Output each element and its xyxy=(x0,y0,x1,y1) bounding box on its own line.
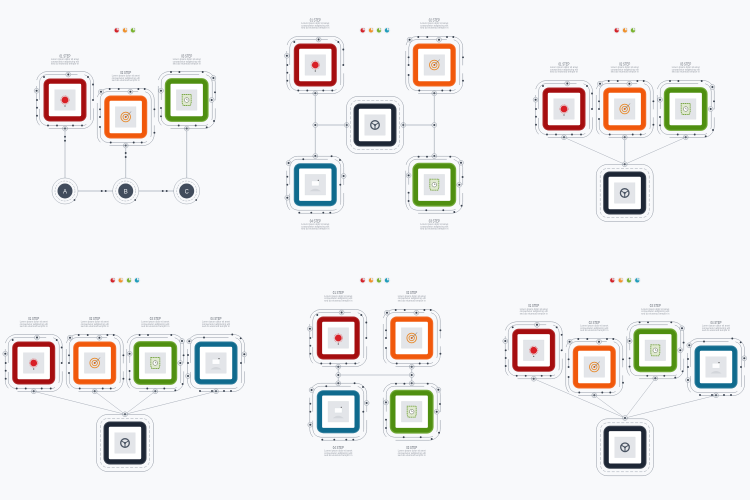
label: step 01: Lorem ipsum dolor sit amet xyxy=(324,295,353,298)
card: orange step xyxy=(566,338,624,396)
label: step 04: 04 STEP xyxy=(333,445,344,450)
panel: four steps in a row into one xyxy=(3,277,247,472)
node C xyxy=(174,178,200,204)
label: step 03: sed do eiusmod tempor in xyxy=(141,325,170,328)
card: dark result xyxy=(596,164,653,222)
card: red step xyxy=(307,310,367,366)
label: step 02: 02 STEP xyxy=(619,62,630,66)
legend dots xyxy=(359,27,390,34)
label: step 02: 02 STEP xyxy=(89,316,100,321)
label: step 04: Lorem ipsum dolor sit amet xyxy=(301,223,330,226)
label: step 03: Lorem ipsum dolor sit amet xyxy=(173,58,201,61)
label: step 02 xyxy=(398,290,426,302)
label: step 04: Lorem ipsum dolor sit amet xyxy=(702,324,730,327)
label: step 03: sed do eiusmod tempor in xyxy=(672,71,700,74)
label: step 01: consectetur adipiscing elit xyxy=(20,323,48,326)
label: step 03: consectetur adipiscing elit xyxy=(641,310,670,313)
connector lines xyxy=(62,126,189,192)
label: step 01: Lorem ipsum dolor sit amet xyxy=(20,320,48,323)
label: step 03: consectetur adipiscing elit xyxy=(420,225,449,228)
label: step 03: consectetur adipiscing elit xyxy=(398,452,426,455)
label: step 03 xyxy=(173,53,201,66)
label: step 02: 02 STEP xyxy=(406,290,417,295)
label: step 03: 03 STEP xyxy=(429,218,440,223)
card: blue step xyxy=(308,382,369,441)
label: step 02: sed do eiusmod tempor in xyxy=(580,329,609,332)
card: dark result xyxy=(96,414,154,472)
label: step 01: sed do eiusmod tempor in xyxy=(324,299,353,302)
node A: A xyxy=(63,188,67,196)
card: green step xyxy=(406,156,464,213)
card: green step xyxy=(657,80,715,138)
label: step 03: consectetur adipiscing elit xyxy=(672,68,700,72)
label: step 04 xyxy=(301,218,330,230)
label: step 04: consectetur adipiscing elit xyxy=(324,452,353,455)
connector lines xyxy=(562,135,688,167)
label: step 02: 02 STEP xyxy=(120,70,131,75)
label: step 01: sed do eiusmod tempor in xyxy=(301,27,330,30)
label: step 02: 02 STEP xyxy=(589,320,600,325)
card: orange step xyxy=(97,88,155,146)
label: step 02: sed do eiusmod tempor in xyxy=(81,325,109,328)
legend dots xyxy=(109,277,140,284)
legend dots xyxy=(609,277,641,284)
label: step 01 xyxy=(51,53,80,66)
label: step 01: 01 STEP xyxy=(60,53,71,58)
label: step 02: sed do eiusmod tempor in xyxy=(398,299,426,302)
label: step 04: sed do eiusmod tempor in xyxy=(202,325,231,328)
card: blue step xyxy=(186,334,247,392)
label: step 04: 04 STEP xyxy=(310,218,321,223)
label: step 04: consectetur adipiscing elit xyxy=(301,225,330,228)
card: green step xyxy=(127,334,185,392)
label: step 03: 03 STEP xyxy=(150,316,161,321)
label: step 04: 04 STEP xyxy=(210,316,222,321)
label: step 02: Lorem ipsum dolor sit amet xyxy=(81,320,109,323)
legend dots xyxy=(113,27,136,34)
label: step 04: sed do eiusmod tempor in xyxy=(301,228,330,231)
label: step 01: 01 STEP xyxy=(28,316,39,321)
label: step 03: Lorem ipsum dolor sit amet xyxy=(641,308,670,311)
label: step 03: Lorem ipsum dolor sit amet xyxy=(420,223,449,226)
label: step 03: sed do eiusmod tempor in xyxy=(173,62,201,65)
label: step 01: sed do eiusmod tempor in xyxy=(20,325,48,328)
card: green step xyxy=(158,71,216,128)
label: step 03: 03 STEP xyxy=(650,303,661,308)
connector lines xyxy=(31,389,219,417)
label: step 01: 01 STEP xyxy=(528,303,539,308)
legend dots xyxy=(359,277,390,284)
label: step 03: consectetur adipiscing elit xyxy=(141,323,170,326)
card: red step xyxy=(284,36,344,94)
label: step 02: consectetur adipiscing elit xyxy=(112,77,140,80)
label: step 04: consectetur adipiscing elit xyxy=(202,323,230,326)
label: step 01: Lorem ipsum dolor sit amet xyxy=(301,22,330,25)
panel: four staggered steps into one xyxy=(503,277,747,476)
panel: four steps in a grid xyxy=(307,277,441,457)
label: step 03: sed do eiusmod tempor in xyxy=(398,454,426,457)
label: step 01: consectetur adipiscing elit xyxy=(301,24,330,28)
label: step 04: 04 STEP xyxy=(710,320,722,325)
label: step 01: consectetur adipiscing elit xyxy=(51,60,79,63)
label: step 03: 03 STEP xyxy=(181,53,192,58)
label: step 04: sed do eiusmod tempor in xyxy=(702,329,731,332)
label: step 03: sed do eiusmod tempor in xyxy=(641,312,670,315)
label: step 04 xyxy=(324,445,353,457)
label: step 03 xyxy=(420,218,449,230)
label: step 02: Lorem ipsum dolor sit amet xyxy=(398,295,426,298)
label: step 01: Lorem ipsum dolor sit amet xyxy=(520,308,548,311)
card: red step xyxy=(34,72,94,128)
label: step 02: sed do eiusmod tempor in xyxy=(112,79,140,82)
label: step 02: sed do eiusmod tempor in xyxy=(611,71,639,74)
label: step 01: Lorem ipsum dolor sit amet xyxy=(550,66,578,69)
label: step 03: 03 STEP xyxy=(680,62,691,66)
card: red step xyxy=(3,334,63,392)
card: red step xyxy=(503,322,563,379)
card: green step xyxy=(627,321,685,379)
label: step 01: sed do eiusmod tempor in xyxy=(520,312,548,315)
label: step 02 xyxy=(81,316,109,328)
label: step 01: 01 STEP xyxy=(333,290,344,295)
label: step 02: consectetur adipiscing elit xyxy=(81,323,109,326)
connector lines xyxy=(531,376,718,420)
connector lines xyxy=(313,91,437,158)
label: step 04: consectetur adipiscing elit xyxy=(702,327,730,330)
label: step 04: Lorem ipsum dolor sit amet xyxy=(324,450,353,453)
label: step 03: consectetur adipiscing elit xyxy=(173,60,201,63)
panel: three steps into one xyxy=(533,27,715,222)
node B: B xyxy=(124,188,128,196)
label: step 02: Lorem ipsum dolor sit amet xyxy=(611,66,639,69)
card: blue step xyxy=(686,338,747,396)
label: step 02: 02 STEP xyxy=(429,18,440,22)
card: orange step xyxy=(66,334,124,392)
label: step 02: Lorem ipsum dolor sit amet xyxy=(580,324,609,327)
label: step 01: sed do eiusmod tempor in xyxy=(51,62,80,65)
label: step 03 xyxy=(398,445,426,457)
label: step 03: Lorem ipsum dolor sit amet xyxy=(141,320,170,323)
node C: C xyxy=(185,188,189,196)
legend dots xyxy=(613,27,636,34)
label: step 02 xyxy=(112,70,140,82)
label: step 01 xyxy=(324,290,353,302)
card: dark result xyxy=(596,419,654,476)
node B xyxy=(113,178,139,204)
label: step 01: sed do eiusmod tempor in xyxy=(550,71,579,74)
node A xyxy=(52,178,78,204)
label: step 01: Lorem ipsum dolor sit amet xyxy=(51,58,79,61)
label: step 03: 03 STEP xyxy=(406,445,417,450)
label: step 02: sed do eiusmod tempor in xyxy=(420,27,449,30)
label: step 01: consectetur adipiscing elit xyxy=(324,297,353,300)
label: step 03: Lorem ipsum dolor sit amet xyxy=(672,66,700,69)
card: orange step xyxy=(596,80,654,138)
label: step 01: consectetur adipiscing elit xyxy=(520,310,548,313)
label: step 02 xyxy=(580,320,609,332)
label: step 02: consectetur adipiscing elit xyxy=(420,24,449,28)
label: step 04: Lorem ipsum dolor sit amet xyxy=(202,320,230,323)
label: step 02 xyxy=(420,18,449,30)
label: step 03: Lorem ipsum dolor sit amet xyxy=(398,450,426,453)
card: green step xyxy=(383,383,441,440)
label: step 03 xyxy=(141,316,170,328)
label: step 01 xyxy=(301,18,330,30)
label: step 04 xyxy=(202,316,231,328)
label: step 01 xyxy=(550,62,579,74)
label: step 02: consectetur adipiscing elit xyxy=(611,68,639,72)
card: orange step xyxy=(383,309,441,366)
label: step 01: consectetur adipiscing elit xyxy=(550,68,578,72)
card: red step xyxy=(533,80,593,138)
label: step 04 xyxy=(702,320,731,332)
label: step 03 xyxy=(641,303,670,315)
panel: four steps around centre xyxy=(284,18,464,230)
label: step 02: consectetur adipiscing elit xyxy=(398,297,426,300)
label: step 02: Lorem ipsum dolor sit amet xyxy=(420,22,449,25)
label: step 02: consectetur adipiscing elit xyxy=(580,327,609,330)
label: step 03: sed do eiusmod tempor in xyxy=(420,228,449,231)
label: step 02 xyxy=(611,62,639,74)
label: step 03 xyxy=(672,62,700,74)
label: step 01: 01 STEP xyxy=(310,18,321,22)
connector lines xyxy=(336,364,414,386)
label: step 01 xyxy=(20,316,48,328)
label: step 02: Lorem ipsum dolor sit amet xyxy=(112,75,140,78)
card: centre dark xyxy=(346,96,404,154)
label: step 04: sed do eiusmod tempor in xyxy=(324,454,353,457)
label: step 01 xyxy=(520,303,548,315)
card: orange step xyxy=(406,36,464,94)
card: blue step xyxy=(285,155,346,214)
label: step 01: 01 STEP xyxy=(558,62,570,66)
panel: three steps from A B C xyxy=(34,27,216,204)
